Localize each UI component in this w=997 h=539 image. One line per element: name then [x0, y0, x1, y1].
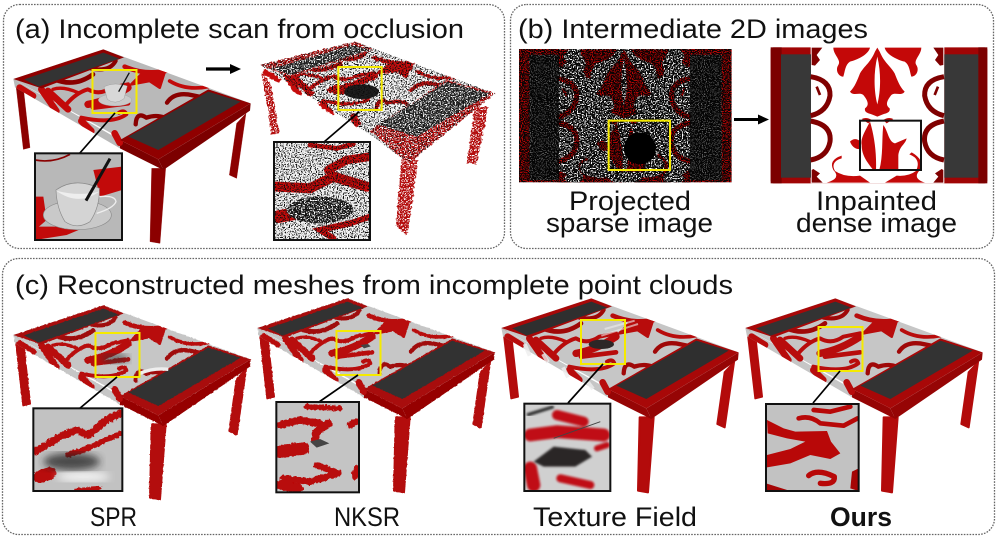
panel: (c) reconstructed meshes [2, 258, 994, 534]
mesh: NKSR [257, 298, 495, 492]
point cloud table [257, 40, 497, 237]
heading (a): (a) Incomplete scan from occlusion [15, 14, 464, 44]
arrow b [734, 114, 769, 124]
inset: NKSR zoom [276, 402, 359, 492]
mesh: Ours [745, 298, 983, 492]
yellow highlight SPR [96, 333, 140, 377]
mesh: SPR [13, 305, 251, 499]
projected sparse image [519, 49, 732, 184]
connector Texture Field [568, 364, 603, 403]
yellow highlight on table [92, 70, 136, 113]
caption: inpainted dense image [796, 186, 957, 238]
connector SPR [79, 377, 117, 409]
inset: Texture Field zoom [524, 404, 610, 491]
connector Ours [813, 371, 840, 403]
inpainted dense image [771, 47, 987, 183]
inset: SPR zoom [33, 408, 122, 491]
caption: projected sparse image [546, 186, 713, 238]
inset: cup zoom [35, 153, 122, 240]
label SPR: SPR [90, 502, 137, 532]
inset: Ours zoom [766, 404, 859, 491]
label NKSR: NKSR [334, 502, 400, 532]
label Ours: Ours [830, 502, 892, 532]
caption: inpainted dense image: Inpainted [816, 186, 937, 216]
yellow highlight NKSR [336, 331, 380, 375]
panel: (a) incomplete scan [4, 4, 504, 248]
arrow a [206, 64, 241, 74]
icon: small cup on table [98, 73, 132, 106]
yellow highlight Ours [818, 327, 862, 371]
heading (b): (b) Intermediate 2D images [518, 14, 868, 44]
connector NKSR [319, 375, 358, 402]
table with cup [13, 49, 251, 243]
label Texture Field: Texture Field [533, 502, 697, 532]
yellow highlight Texture Field [581, 320, 625, 364]
inset: point cloud zoom [274, 142, 370, 240]
caption: projected sparse image: Projected [569, 186, 691, 216]
caption: projected sparse image: sparse image [546, 208, 713, 238]
panel: (b) intermediate 2D images [510, 4, 994, 248]
heading (c): (c) Reconstructed meshes from incomplete point clouds [15, 270, 733, 300]
mesh: Texture Field [501, 298, 739, 492]
connector line [79, 113, 115, 154]
caption: inpainted dense image: dense image [796, 208, 957, 238]
